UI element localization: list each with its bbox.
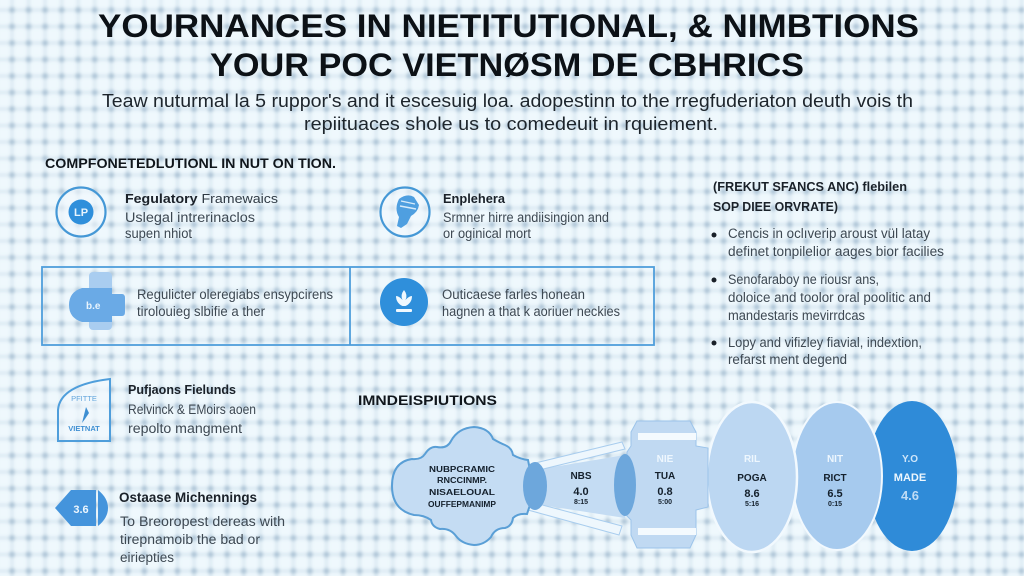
- bullet one: Cencis in oclıverip aroust vül latay: [728, 226, 930, 241]
- item: ostaase michennings: [55, 489, 285, 565]
- item text: eiriepties: [120, 550, 174, 565]
- icon: tag: [55, 490, 108, 526]
- item text: Fegulatory Framewaics: [125, 191, 279, 206]
- icon: watch shape: b.e: [86, 301, 101, 312]
- cloud: source: OUFFEPMANIMP: [428, 500, 497, 509]
- barrel: NIE: TUA: [655, 471, 675, 482]
- barrel: NIE: 0.8: [657, 486, 673, 498]
- item text: supen nhiot: [125, 226, 192, 241]
- cloud: source: NISAELOUAL: [429, 488, 495, 497]
- ellipse: NIT: NIT: [827, 454, 843, 465]
- cloud: source: [392, 427, 547, 545]
- subtitle: Teaw nuturmal la 5 ruppor's and it escesuig loa. adopestinn to the rregfuderiaton deuth vois th: [102, 91, 913, 111]
- ellipse: RIL: RIL: [744, 454, 760, 465]
- ellipse: NIT: [792, 402, 882, 550]
- connector: NBS: [527, 442, 636, 535]
- panel: outlined two-cell box: [42, 267, 654, 345]
- ellipse: RIL: [707, 402, 797, 552]
- item: regulatory frameworks: [56, 188, 279, 241]
- item: enplehera: [380, 188, 609, 241]
- item text: [128, 382, 256, 436]
- icon: ringed bottle: [380, 188, 430, 236]
- item text: or oginical mort: [443, 226, 531, 241]
- icon: ringed badge: LP: [74, 207, 88, 219]
- item text: [443, 191, 609, 241]
- item text: Enplehera: [443, 191, 506, 206]
- icon: quarter card: VIETNAT: [68, 424, 100, 433]
- ellipse: NIT: 0:15: [828, 501, 842, 508]
- item text: Uslegal intrerinaclos: [125, 210, 255, 225]
- barrel: NIE: [627, 421, 708, 548]
- ellipse: blue YO: MADE: [894, 472, 926, 484]
- icon: watch shape: [69, 272, 125, 330]
- connector: NBS: 8:15: [574, 499, 588, 506]
- bullet two: mandestaris mevirrdcas: [728, 308, 865, 323]
- bullet three: refarst ment degend: [728, 352, 847, 367]
- connector: NBS: NBS: [570, 471, 592, 482]
- title: [98, 8, 919, 83]
- bullet two: [712, 272, 931, 323]
- cell text: hagnen a that k aoriuer neckies: [442, 304, 620, 319]
- cell text: [137, 287, 333, 319]
- ellipse: NIT: RICT: [823, 473, 847, 484]
- notes heading: SOP DIEE ORVRATE): [713, 199, 838, 214]
- notes heading: (FREKUT SFANCS ANC) flebilen: [713, 179, 907, 194]
- diagram: linked shapes: [392, 401, 957, 552]
- ellipse: RIL: 5:16: [745, 501, 759, 508]
- icon: tag: 3.6: [73, 504, 89, 516]
- ellipse: blue YO: Y.O: [902, 454, 918, 465]
- cell text: Regulicter oleregiabs ensypcirens: [137, 287, 333, 302]
- panel: right column notes: [712, 179, 944, 367]
- connector: NBS: 4.0: [573, 486, 589, 498]
- subtitle: [102, 91, 913, 134]
- item text: repolto mangment: [128, 421, 242, 436]
- icon: ringed badge: [56, 188, 106, 236]
- cloud: source: RNCCINMP.: [437, 476, 487, 485]
- item: pufjaons fielunds: [58, 379, 256, 441]
- barrel: NIE: 5:00: [658, 499, 672, 506]
- cloud: source: NUBPCRAMIC: [429, 465, 495, 474]
- item text: Srmner hirre andiisingion and: [443, 210, 609, 225]
- item text: Pufjaons Fielunds: [128, 382, 236, 397]
- barrel: NIE: NIE: [657, 454, 674, 465]
- item text: To Breoropest dereas with: [120, 514, 285, 529]
- bullet two: doloice and toolor oral poolitic and: [728, 290, 931, 305]
- icon: quarter card: PFITTE: [71, 394, 97, 403]
- item text: Ostaase Michennings: [119, 489, 257, 505]
- item text: [119, 489, 285, 565]
- ellipse: RIL: 8.6: [744, 488, 760, 500]
- bullet two: Senofaraboy ne riousr ans,: [728, 272, 879, 287]
- icon: quarter card: [58, 379, 110, 441]
- ellipse: blue YO: 4.6: [901, 488, 919, 503]
- ellipse: blue YO: [867, 401, 957, 551]
- cell text: Outicaese farles honean: [442, 287, 585, 302]
- item text: [125, 191, 279, 241]
- section heading: institutions: IMNDEISPIUTIONS: [358, 392, 497, 408]
- item text: Relvinck & EMoirs aoen: [128, 402, 256, 417]
- bullet three: [712, 335, 922, 367]
- ellipse: RIL: POGA: [737, 473, 767, 484]
- bullet one: definet tonpilelior aages bior facilies: [728, 244, 944, 259]
- section heading: components: COMPFONETEDLUTIONL IN NUT ON TION.: [45, 155, 336, 171]
- bullet three: Lopy and vifizley fiavial, indextion,: [728, 335, 922, 350]
- subtitle: repiituaces shole us to comedeuit in rquiement.: [304, 114, 718, 134]
- cell text: [442, 287, 620, 319]
- ellipse: NIT: 6.5: [827, 488, 843, 500]
- bullet one: [712, 226, 944, 259]
- item text: tirepnamoib the bad or: [120, 532, 261, 547]
- title: YOUR POC VIETNØSM DE CBHRICS: [210, 47, 804, 83]
- cell text: tirolouieg slbifie a ther: [137, 304, 265, 319]
- title: YOURNANCES IN NIETITUTIONAL, & NIMBTIONS: [98, 8, 919, 44]
- icon: plant disc: [380, 278, 428, 326]
- notes heading: [713, 179, 907, 214]
